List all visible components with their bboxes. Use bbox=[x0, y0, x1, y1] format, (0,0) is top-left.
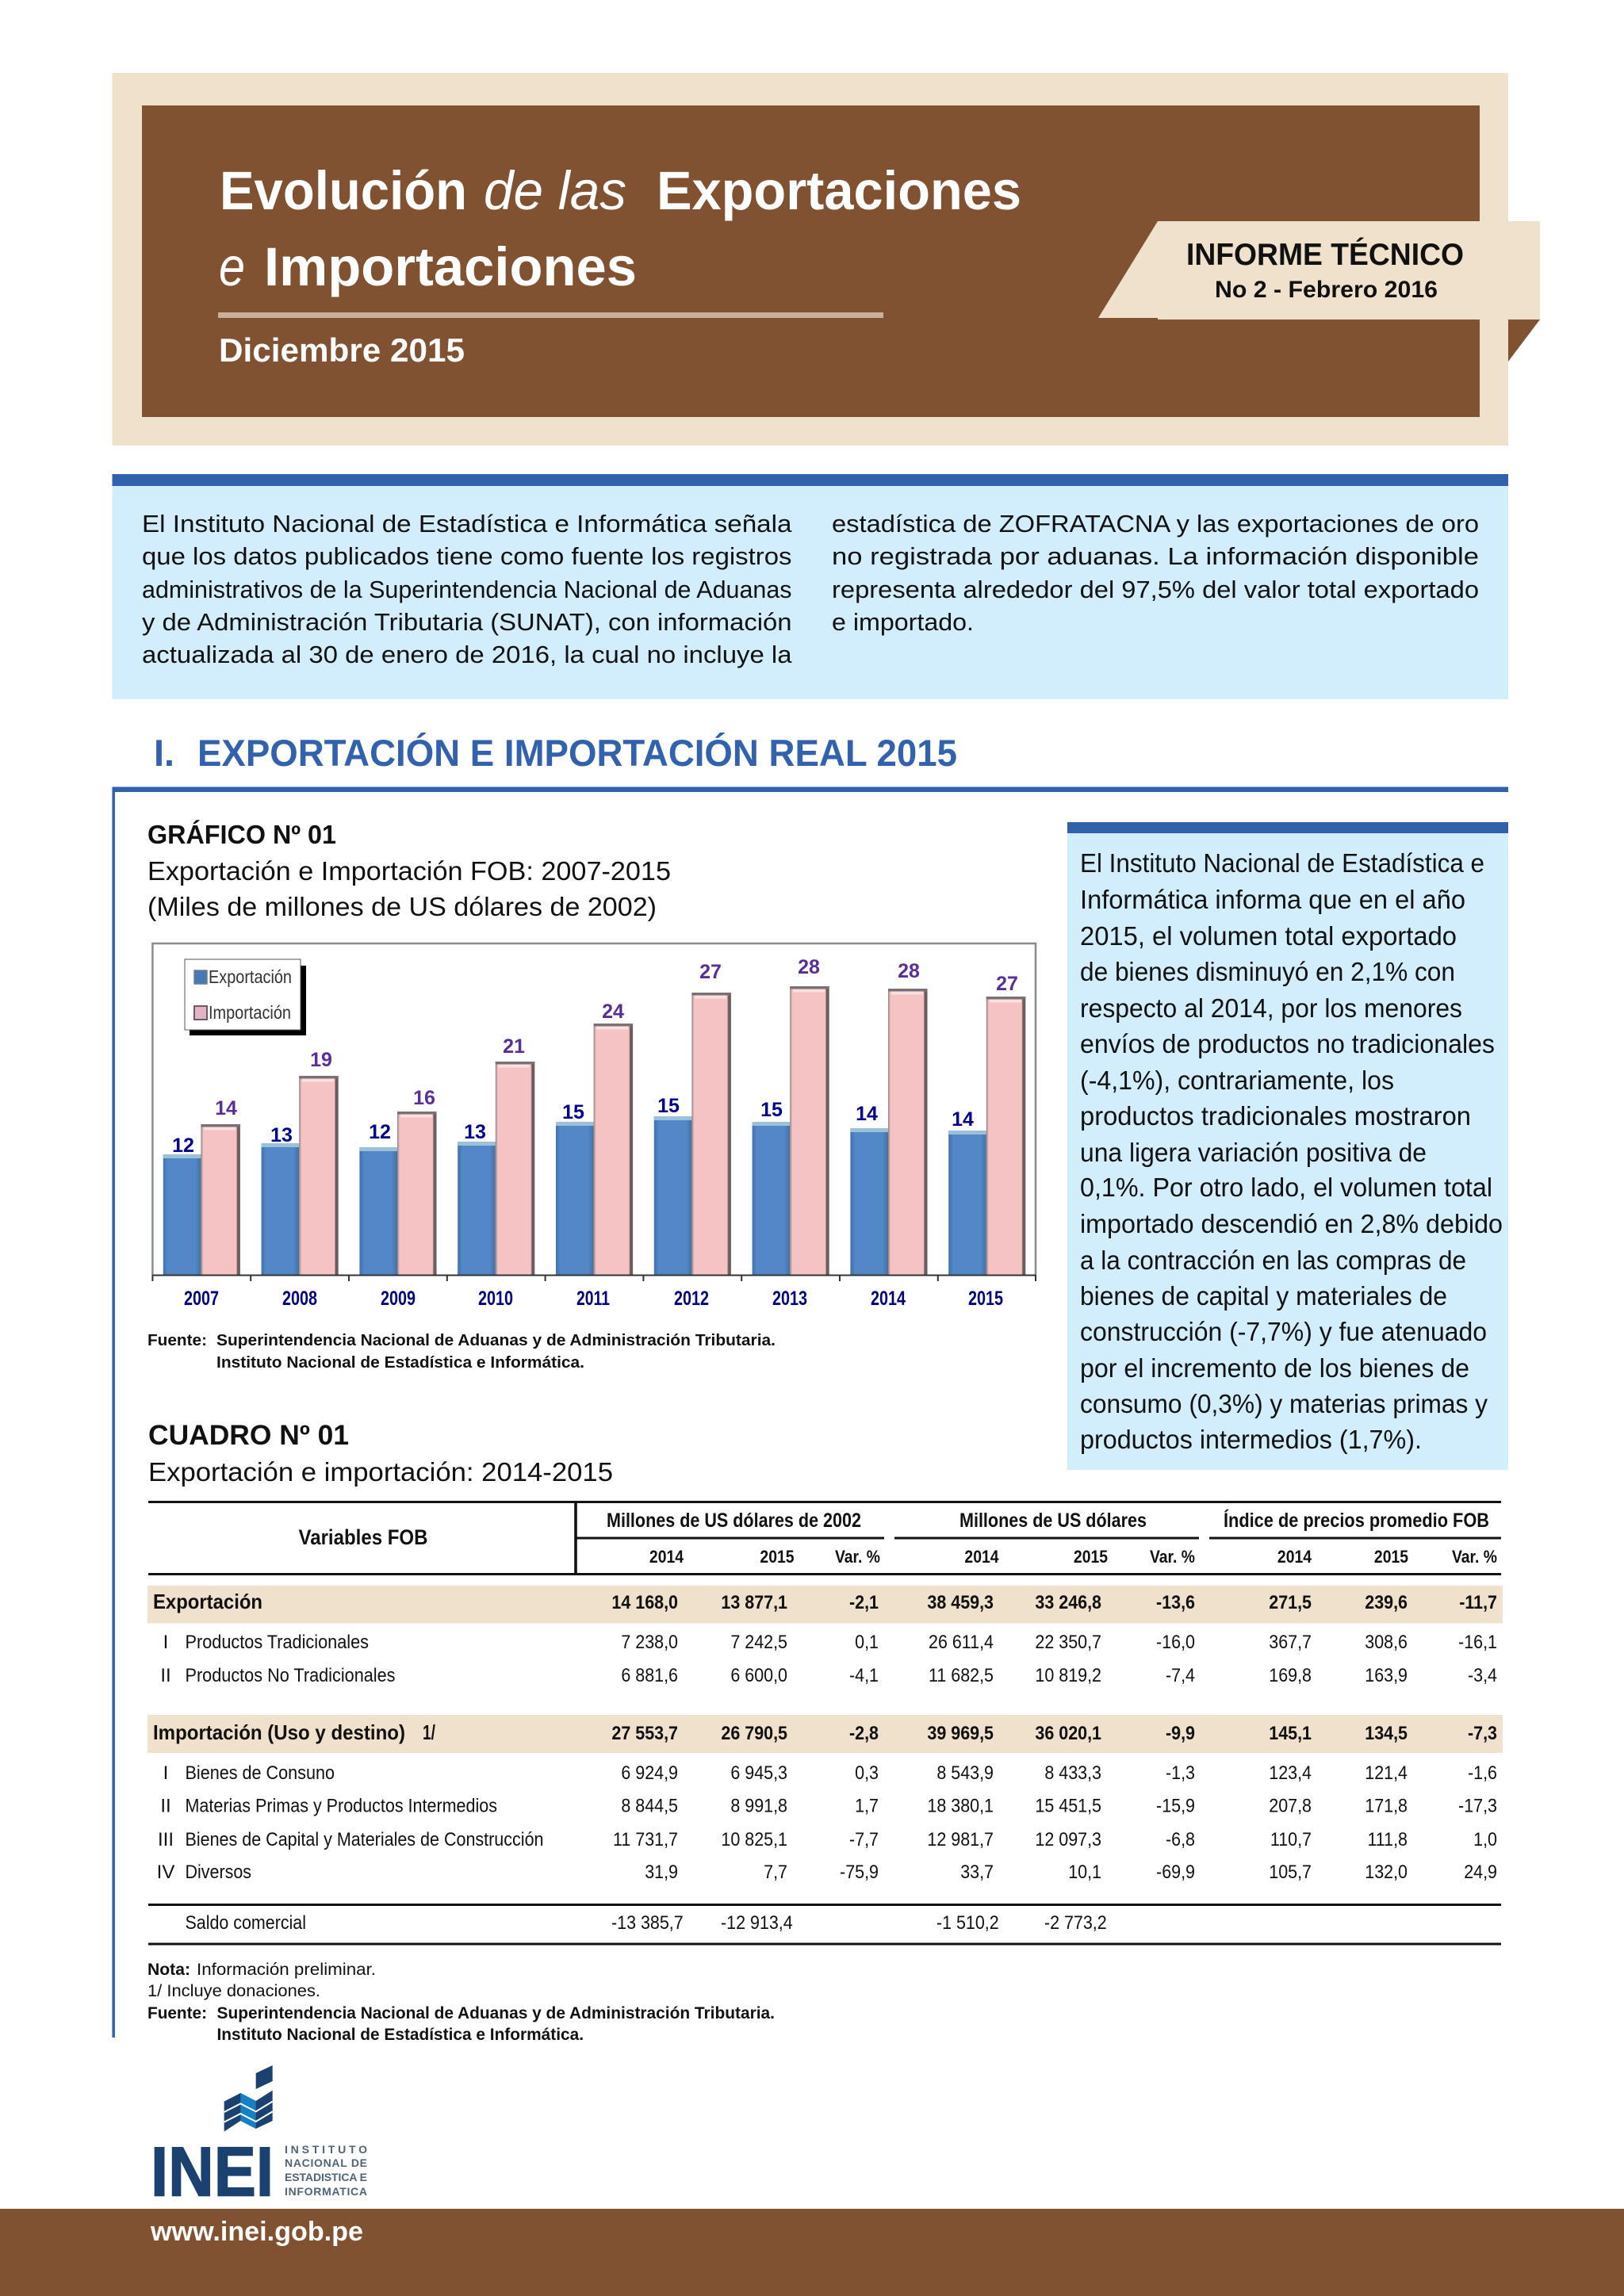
column: US$, 2014: 11 682,5 bbox=[929, 1664, 994, 1686]
import value labels: 16 bbox=[413, 1087, 435, 1109]
row labels: II bbox=[160, 1795, 171, 1817]
section heading: EXPORTACIÓN E IMPORTACIÓN REAL 2015 bbox=[197, 732, 957, 774]
year labels: 2011 bbox=[576, 1288, 610, 1310]
date: Diciembre 2015 bbox=[219, 331, 465, 369]
table notes: Instituto Nacional de Estadística e Informática. bbox=[217, 2026, 584, 2044]
INEI logo bbox=[151, 2065, 367, 2210]
column: US$ 2002, 2014: 31,9 bbox=[645, 1861, 678, 1882]
column: US$, 2015: 33 246,8 bbox=[1035, 1591, 1101, 1613]
summary paragraph: por el incremento de los bienes de bbox=[1080, 1353, 1469, 1383]
section frame bbox=[113, 790, 1508, 2038]
table notes: Nota: bbox=[147, 1961, 190, 1979]
column: price index, var: -16,1 bbox=[1458, 1631, 1497, 1652]
year labels: 2014 bbox=[871, 1288, 906, 1310]
intro left column: actualizada al 30 de enero de 2016, la cual no incluye la bbox=[142, 641, 792, 668]
ribbon: informe técnico: No 2 - Febrero 2016 bbox=[1215, 277, 1438, 303]
column: US$, 2015: 10,1 bbox=[1068, 1861, 1101, 1882]
intro left column: que los datos publicados tiene como fuente los registros bbox=[142, 543, 792, 570]
summary paragraph: Informática informa que en el año bbox=[1080, 885, 1465, 914]
logo small text: ESTADISTICA E bbox=[285, 2171, 367, 2183]
export value labels: 12 bbox=[369, 1121, 391, 1143]
year labels: 2013 bbox=[772, 1288, 807, 1310]
row labels: I bbox=[163, 1632, 168, 1653]
column: price index, 2014: 123,4 bbox=[1269, 1762, 1312, 1783]
column: US$ 2002, 2015: 7,7 bbox=[764, 1861, 787, 1882]
year labels: 2009 bbox=[381, 1288, 416, 1310]
header rows: 2014 bbox=[649, 1548, 684, 1567]
header rows: Variables FOB bbox=[298, 1525, 428, 1549]
intro left column: y de Administración Tributaria (SUNAT), con información bbox=[142, 609, 792, 636]
column: US$ 2002, 2014 bbox=[611, 1591, 684, 1933]
import value labels: 27 bbox=[699, 961, 722, 983]
column: US$ 2002, 2014: 6 881,6 bbox=[621, 1664, 678, 1686]
column: US$ 2002, 2015: 26 790,5 bbox=[721, 1722, 787, 1743]
year labels: 2008 bbox=[282, 1288, 317, 1310]
column: US$, 2014: 18 380,1 bbox=[927, 1794, 994, 1816]
column: price index, 2014: 105,7 bbox=[1269, 1861, 1312, 1882]
import value labels: 19 bbox=[310, 1049, 332, 1071]
column: US$, var: -16,0 bbox=[1156, 1631, 1195, 1652]
column: price index, var: 1,0 bbox=[1473, 1828, 1497, 1850]
import value labels: 28 bbox=[798, 956, 820, 978]
summary paragraph: productos intermedios (1,7%). bbox=[1080, 1425, 1422, 1454]
export value labels: 14 bbox=[952, 1108, 974, 1131]
row labels: Bienes de Consuno bbox=[186, 1762, 335, 1784]
title: de las bbox=[484, 160, 626, 221]
import bars bbox=[201, 986, 1025, 1275]
table notes: 1/ Incluye donaciones. bbox=[147, 1982, 320, 2000]
export value labels: 13 bbox=[464, 1121, 486, 1143]
import value labels: 27 bbox=[996, 973, 1018, 995]
bar chart bbox=[152, 943, 1036, 1310]
column: price index, 2014: 110,7 bbox=[1270, 1828, 1312, 1850]
header rows: 2015 bbox=[760, 1548, 795, 1567]
row labels: Materias Primas y Productos Intermedios bbox=[186, 1795, 497, 1817]
icon: logo mark bbox=[224, 2065, 273, 2132]
column: US$, var: -13,6 bbox=[1156, 1591, 1195, 1613]
header rows: 2015 bbox=[1074, 1548, 1108, 1567]
header rows: Índice de precios promedio FOB bbox=[1224, 1509, 1489, 1532]
title bbox=[219, 160, 1021, 297]
row labels: Exportación bbox=[153, 1590, 262, 1613]
export value labels: 14 bbox=[856, 1103, 878, 1125]
intro right column: no registrada por aduanas. La información disponible bbox=[832, 543, 1479, 570]
column: US$, 2015: -2 773,2 bbox=[1044, 1911, 1107, 1933]
chart heading: (Miles de millones de US dólares de 2002) bbox=[147, 892, 657, 921]
logo small text: INSTITUTO bbox=[285, 2143, 367, 2156]
column: US$, 2014: 26 611,4 bbox=[929, 1631, 994, 1652]
row labels bbox=[153, 1590, 544, 1934]
table notes: Superintendencia Nacional de Aduanas y de Administración Tributaria. bbox=[217, 2004, 775, 2022]
column: price index, 2014 bbox=[1269, 1591, 1312, 1882]
column: US$, 2015: 12 097,3 bbox=[1035, 1828, 1101, 1850]
summary paragraph: productos tradicionales mostraron bbox=[1080, 1101, 1471, 1131]
column: price index, 2015: 121,4 bbox=[1365, 1762, 1408, 1783]
column: US$ 2002, var: -7,7 bbox=[849, 1828, 879, 1850]
year labels: 2010 bbox=[478, 1288, 513, 1310]
summary paragraph: construcción (-7,7%) y fue atenuado bbox=[1080, 1317, 1487, 1346]
title: Evolución bbox=[220, 160, 467, 221]
column: price index, var: -1,6 bbox=[1468, 1762, 1497, 1783]
table notes: Información preliminar. bbox=[197, 1961, 376, 1979]
column: price index, var: -11,7 bbox=[1459, 1591, 1497, 1613]
column: price index, 2014: 207,8 bbox=[1269, 1794, 1312, 1816]
column: US$ 2002, 2014: 7 238,0 bbox=[621, 1631, 678, 1652]
import value labels: 14 bbox=[215, 1097, 237, 1119]
column: US$ 2002, 2015: 8 991,8 bbox=[730, 1794, 787, 1816]
intro left column: El Instituto Nacional de Estadística e Informática señala bbox=[142, 511, 792, 538]
export value labels bbox=[172, 1095, 974, 1157]
legend: Importación bbox=[209, 1002, 291, 1023]
export value labels: 13 bbox=[270, 1124, 293, 1146]
header rows: Var. % bbox=[1452, 1548, 1497, 1567]
column: US$ 2002, 2015: 10 825,1 bbox=[721, 1828, 787, 1850]
year labels: 2015 bbox=[968, 1288, 1003, 1310]
column: price index, var: -3,4 bbox=[1468, 1664, 1497, 1686]
section heading: I. bbox=[154, 732, 174, 774]
column: US$ 2002, 2015: 7 242,5 bbox=[730, 1631, 787, 1652]
column: US$, var: -7,4 bbox=[1166, 1664, 1195, 1686]
row labels: IV bbox=[157, 1862, 174, 1883]
intro left column: administrativos de la Superintendencia Nacional de Aduanas bbox=[142, 576, 791, 603]
column: US$, 2014 bbox=[927, 1591, 999, 1933]
logo small text: INFORMATICA bbox=[285, 2185, 367, 2198]
row labels: Bienes de Capital y Materiales de Construcción bbox=[186, 1829, 544, 1850]
export value labels: 15 bbox=[657, 1095, 680, 1117]
axis bbox=[152, 1275, 1036, 1281]
column: US$, var bbox=[1156, 1591, 1195, 1882]
summary paragraph: 0,1%. Por otro lado, el volumen total bbox=[1080, 1173, 1492, 1202]
export value labels: 12 bbox=[172, 1135, 194, 1157]
intro left column bbox=[142, 511, 792, 668]
column: US$, 2015: 15 451,5 bbox=[1035, 1794, 1101, 1816]
legend: Exportación bbox=[209, 966, 292, 987]
chart heading: GRÁFICO Nº 01 bbox=[147, 820, 336, 849]
import value labels bbox=[215, 956, 1018, 1119]
header rows: Var. % bbox=[1150, 1548, 1195, 1567]
header rows: 2014 bbox=[964, 1548, 999, 1567]
row labels: Saldo comercial bbox=[186, 1912, 306, 1934]
row labels: Productos Tradicionales bbox=[186, 1632, 369, 1653]
summary paragraph: respecto al 2014, por los menores bbox=[1080, 993, 1462, 1023]
summary paragraph bbox=[1080, 848, 1503, 1454]
year labels: 2012 bbox=[674, 1288, 709, 1310]
column: price index, 2015 bbox=[1365, 1591, 1408, 1882]
column: US$ 2002, 2014: 8 844,5 bbox=[621, 1794, 678, 1816]
column: US$ 2002, 2015: 6 945,3 bbox=[730, 1762, 787, 1783]
header rows bbox=[147, 1502, 1503, 1753]
column: US$, 2015: 22 350,7 bbox=[1035, 1631, 1101, 1652]
column: US$, 2015: 8 433,3 bbox=[1044, 1762, 1101, 1783]
column: price index, 2015: 308,6 bbox=[1365, 1631, 1408, 1652]
header rows: Millones de US dólares de 2002 bbox=[607, 1510, 861, 1532]
summary paragraph: El Instituto Nacional de Estadística e bbox=[1080, 848, 1484, 878]
column: US$ 2002, 2015: 6 600,0 bbox=[730, 1664, 787, 1686]
year labels: 2007 bbox=[184, 1288, 219, 1310]
summary paragraph: envíos de productos no tradicionales bbox=[1080, 1029, 1495, 1058]
row labels: Diversos bbox=[186, 1862, 251, 1883]
ribbon: informe técnico: INFORME TÉCNICO bbox=[1186, 237, 1464, 272]
logo small text: NACIONAL DE bbox=[285, 2156, 367, 2169]
logo wordmark: INEI bbox=[151, 2133, 274, 2210]
panel: summary text bbox=[1067, 822, 1508, 1470]
column: US$, 2014: 39 969,5 bbox=[927, 1722, 994, 1743]
table notes: Fuente: bbox=[147, 2004, 207, 2022]
column: price index, 2014: 145,1 bbox=[1269, 1722, 1312, 1743]
column: US$ 2002, var: 1,7 bbox=[855, 1794, 879, 1816]
column: US$ 2002, 2014: 14 168,0 bbox=[611, 1591, 678, 1613]
column: US$, 2014: 38 459,3 bbox=[927, 1591, 994, 1613]
chart heading bbox=[147, 820, 671, 921]
header panel bbox=[113, 73, 1540, 446]
row labels: III bbox=[158, 1829, 174, 1850]
column: US$, var: -1,3 bbox=[1166, 1762, 1195, 1783]
row labels: II bbox=[160, 1665, 171, 1686]
column: US$ 2002, var: -2,1 bbox=[849, 1591, 879, 1613]
column: US$, var: -69,9 bbox=[1156, 1861, 1195, 1882]
column: US$, 2014: 8 543,9 bbox=[936, 1762, 994, 1783]
column: US$, var: -9,9 bbox=[1166, 1722, 1195, 1743]
column: US$, 2015: 10 819,2 bbox=[1035, 1664, 1101, 1686]
column: price index, 2015: 111,8 bbox=[1367, 1828, 1408, 1850]
intro right column: e importado. bbox=[832, 609, 974, 636]
column: price index, 2014: 367,7 bbox=[1269, 1631, 1312, 1652]
legend bbox=[185, 959, 306, 1035]
row labels: I bbox=[163, 1762, 168, 1784]
import value labels: 28 bbox=[898, 960, 920, 982]
title underline bbox=[218, 312, 883, 318]
column: US$ 2002, 2014: 27 553,7 bbox=[611, 1722, 678, 1743]
column: US$, 2014: 12 981,7 bbox=[927, 1828, 994, 1850]
summary paragraph: a la contracción en las compras de bbox=[1080, 1246, 1466, 1275]
column: US$ 2002, var: -4,1 bbox=[849, 1664, 879, 1686]
intro right column: estadística de ZOFRATACNA y las exportaciones de oro bbox=[832, 511, 1479, 538]
logo small text bbox=[285, 2143, 367, 2198]
column: price index, var: -17,3 bbox=[1458, 1794, 1497, 1816]
header rows: 2015 bbox=[1374, 1548, 1408, 1567]
column: price index, 2015: 171,8 bbox=[1365, 1794, 1408, 1816]
column: price index, 2015: 132,0 bbox=[1365, 1861, 1408, 1882]
column: price index, 2014: 271,5 bbox=[1269, 1591, 1312, 1613]
column: price index, var bbox=[1458, 1591, 1497, 1882]
column: US$ 2002, 2014: -13 385,7 bbox=[611, 1911, 684, 1933]
footer bar: www.inei.gob.pe bbox=[150, 2217, 363, 2247]
chart source note: Fuente: bbox=[147, 1331, 207, 1349]
row labels: Importación (Uso y destino) bbox=[153, 1720, 405, 1744]
column: US$ 2002, var: -75,9 bbox=[840, 1861, 879, 1882]
summary paragraph: consumo (0,3%) y materias primas y bbox=[1080, 1389, 1488, 1418]
summary paragraph: una ligera variación positiva de bbox=[1080, 1138, 1427, 1167]
chart heading: Exportación e Importación FOB: 2007-2015 bbox=[147, 856, 671, 886]
intro right column: representa alrededor del 97,5% del valor total exportado bbox=[832, 576, 1479, 603]
column: US$, var: -6,8 bbox=[1166, 1828, 1195, 1850]
export value labels: 15 bbox=[760, 1099, 783, 1121]
export value labels: 15 bbox=[562, 1101, 584, 1123]
export bars bbox=[163, 1116, 986, 1275]
table heading: CUADRO Nº 01 bbox=[148, 1420, 349, 1451]
column: US$ 2002, 2015 bbox=[721, 1591, 793, 1933]
ribbon: informe técnico bbox=[1098, 221, 1540, 362]
summary paragraph: 2015, el volumen total exportado bbox=[1080, 921, 1457, 951]
column: US$ 2002, var: 0,3 bbox=[855, 1762, 879, 1783]
summary paragraph: bienes de capital y materiales de bbox=[1080, 1281, 1447, 1311]
column: US$, 2015 bbox=[1035, 1591, 1107, 1933]
import value labels: 24 bbox=[602, 1001, 624, 1023]
column: US$, 2014: -1 510,2 bbox=[936, 1911, 999, 1933]
intro right column bbox=[832, 511, 1479, 636]
table notes bbox=[147, 1961, 775, 2044]
summary paragraph: (-4,1%), contrariamente, los bbox=[1080, 1066, 1394, 1095]
panel: intro text bbox=[113, 474, 1508, 699]
chart source note: Instituto Nacional de Estadística e Informática. bbox=[216, 1353, 584, 1372]
column: US$ 2002, 2014: 6 924,9 bbox=[621, 1762, 678, 1783]
title: Importaciones bbox=[264, 236, 637, 297]
row labels: 1/ bbox=[423, 1720, 435, 1744]
column: US$, 2015: 36 020,1 bbox=[1035, 1722, 1101, 1743]
table heading bbox=[148, 1420, 613, 1487]
column: US$ 2002, 2015: -12 913,4 bbox=[721, 1911, 793, 1933]
header rows: Var. % bbox=[835, 1548, 880, 1567]
chart source note bbox=[147, 1331, 776, 1372]
row labels: Productos No Tradicionales bbox=[186, 1665, 395, 1686]
column: price index, var: -7,3 bbox=[1468, 1722, 1497, 1743]
column: US$, 2014: 33,7 bbox=[960, 1861, 994, 1882]
import value labels: 21 bbox=[503, 1035, 525, 1058]
header rows: 2014 bbox=[1277, 1548, 1312, 1567]
title: Exportaciones bbox=[657, 160, 1021, 221]
year labels bbox=[184, 1288, 1003, 1310]
column: price index, 2015: 163,9 bbox=[1365, 1664, 1408, 1686]
column: price index, 2014: 169,8 bbox=[1269, 1664, 1312, 1686]
table heading: Exportación e importación: 2014-2015 bbox=[148, 1457, 613, 1487]
column: US$ 2002, var bbox=[840, 1591, 879, 1882]
footer bar bbox=[0, 2209, 1624, 2296]
column: price index, 2015: 134,5 bbox=[1365, 1722, 1408, 1743]
column: US$ 2002, var: 0,1 bbox=[855, 1631, 879, 1652]
column: US$ 2002, 2015: 13 877,1 bbox=[721, 1591, 787, 1613]
title: e bbox=[219, 236, 245, 297]
column: price index, var: 24,9 bbox=[1464, 1861, 1497, 1882]
chart source note: Superintendencia Nacional de Aduanas y de Administración Tributaria. bbox=[216, 1331, 776, 1349]
column: price index, 2015: 239,6 bbox=[1365, 1591, 1408, 1613]
column: US$, var: -15,9 bbox=[1156, 1794, 1195, 1816]
summary paragraph: de bienes disminuyó en 2,1% con bbox=[1080, 957, 1455, 986]
table bbox=[147, 1502, 1503, 1944]
column: US$ 2002, var: -2,8 bbox=[849, 1722, 879, 1743]
header rows: Millones de US dólares bbox=[959, 1510, 1147, 1532]
summary paragraph: importado descendió en 2,8% debido bbox=[1080, 1209, 1503, 1238]
column: US$ 2002, 2014: 11 731,7 bbox=[613, 1828, 678, 1850]
